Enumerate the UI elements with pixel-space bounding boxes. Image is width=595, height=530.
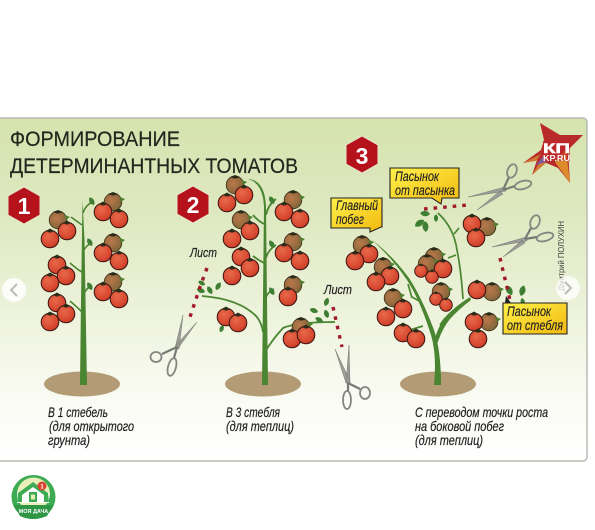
stem 1 [80, 200, 87, 385]
label: leaf right: Лист [323, 282, 352, 297]
plant 2 [196, 175, 335, 396]
credit: Дмитрий ПОЛУХИН [556, 221, 566, 291]
callout: side shoot of side shoot: от пасынка [395, 183, 455, 198]
scissors: top [468, 163, 532, 210]
stem 2 [248, 179, 268, 385]
leaves top [413, 210, 438, 232]
leaf cluster left [196, 279, 222, 295]
badge: step 1 [8, 187, 40, 224]
scissors: right [335, 345, 370, 409]
logo: my dacha: 1 [40, 484, 44, 490]
callout: side shoot of side shoot [390, 168, 459, 204]
ground 1 [44, 372, 120, 396]
caption 3 [415, 404, 548, 448]
logo: my dacha: МОЯ ДАЧА [19, 509, 48, 515]
caption 1 [48, 404, 134, 448]
badge: step 1: 1 [18, 193, 31, 219]
callout: main shoot: побег [336, 212, 364, 227]
shoots 1 [70, 202, 92, 312]
logo: KP star: КП [543, 140, 570, 156]
caption 3: С переводом точки роста [415, 404, 548, 420]
nav button: next [556, 276, 580, 300]
caption 3: на боковой побег [415, 418, 504, 434]
caption 1: грунта) [48, 432, 90, 448]
ground 2 [225, 372, 301, 396]
callout: side shoot of side shoot: Пасынок [395, 169, 439, 184]
title [10, 128, 298, 178]
caption 1: В 1 стебель [48, 404, 108, 420]
caption 2: (для теплиц) [226, 418, 294, 434]
stem 3: upper shoot [400, 213, 463, 333]
callout: main shoot [331, 198, 382, 232]
badge: step 2: 2 [187, 192, 199, 218]
caption 2 [226, 404, 294, 434]
badge: step 3: 3 [356, 143, 368, 169]
nav button: previous [2, 278, 26, 302]
callout: side shoot of stem: от стебля [507, 318, 563, 333]
plant 3 [346, 210, 527, 396]
title: ДЕТЕРМИНАНТНЫХ ТОМАТОВ [10, 155, 298, 178]
caption 1: (для открытого [49, 418, 134, 434]
leaves right [504, 284, 527, 306]
callout: side shoot of stem: Пасынок [507, 304, 551, 319]
tomatoes 3 [346, 214, 504, 348]
scissors: left [150, 315, 197, 377]
cut marks: red dashed lines [190, 205, 510, 347]
title: ФОРМИРОВАНИЕ [10, 128, 180, 151]
badge: step 3 [346, 136, 378, 173]
scissors: middle [492, 214, 554, 257]
callout: side shoot of stem [503, 296, 567, 334]
panel: background [0, 118, 587, 461]
logo: KP star [523, 123, 583, 183]
logo: KP star: KP.RU [543, 154, 570, 163]
tomatoes 1 [41, 192, 128, 331]
ground 3 [400, 372, 476, 396]
caption 3: (для теплиц) [415, 432, 483, 448]
badge: step 2 [177, 186, 209, 223]
leaf cluster right [309, 297, 330, 324]
tomatoes 2 [217, 175, 315, 348]
stem 3: main and left branch [372, 240, 441, 385]
branches 2 [202, 199, 335, 352]
plant 1 [41, 192, 128, 396]
callout: main shoot: Главный [336, 198, 378, 213]
stem 3: right branch [433, 297, 471, 348]
caption 2: В 3 стебля [226, 404, 280, 420]
logo: my dacha [12, 475, 56, 519]
label: leaf left: Лист [189, 245, 217, 260]
